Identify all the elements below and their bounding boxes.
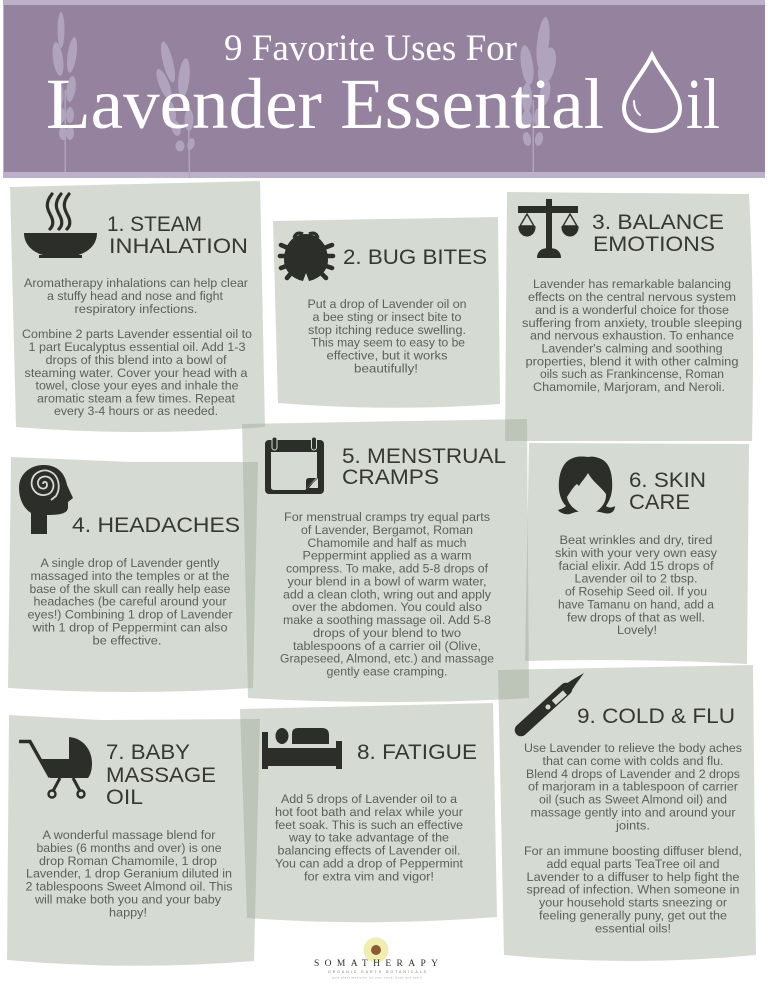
icon: bug [280, 233, 333, 281]
body text: massaged into the temples or at the [30, 569, 230, 583]
body text: respiratory infections. [74, 302, 198, 316]
body text: base of the skull can really help ease [30, 582, 231, 596]
body text [26, 828, 233, 920]
body text [524, 741, 742, 936]
title line one: 9 Favorite Uses For [224, 28, 517, 69]
body text: Lovely! [617, 623, 657, 637]
body text: will make both you and your baby [34, 892, 222, 906]
body text: feeling generally puny, get out the [539, 908, 727, 922]
body text: with 1 drop of Peppermint can also [31, 620, 228, 634]
body text: babies (6 months and over) is one [36, 841, 222, 855]
title suffix: il [686, 64, 720, 144]
body text [275, 792, 464, 884]
lavender sprig left [51, 12, 79, 172]
body text: effective, but it works [326, 348, 448, 362]
icon: oil drop [624, 55, 680, 131]
panel 6: skin care [555, 456, 718, 637]
body text: your blend in a bowl of warm water, [288, 574, 486, 588]
body text [308, 297, 467, 376]
icon: sunflower [364, 938, 388, 962]
body text: eyes!) Combining 1 drop of Lavender [28, 608, 233, 622]
body text: facial elixir. Add 15 drops of [558, 559, 714, 573]
body text: happy! [109, 906, 147, 920]
body text [555, 533, 718, 637]
body text: skin with your very own easy [555, 546, 718, 560]
body text: oils such as Frankincense, Roman [540, 367, 724, 381]
body text: For an immune boosting diffuser blend, [524, 844, 742, 858]
heading: 2. BUG BITES [343, 246, 487, 269]
body text: Lavender's calming and soothing [542, 342, 723, 356]
body text: towel, close your eyes and inhale the [36, 378, 239, 392]
body text: compress. To make, add 5-8 drops of [286, 562, 489, 576]
icon: scales [518, 199, 579, 258]
brand tagline: ORGANIC EARTH BOTANICALS [328, 970, 427, 974]
body text: your household starts sneezing or [539, 896, 727, 910]
body text: headaches (be careful around your [34, 594, 226, 608]
heading: CRAMPS [342, 466, 439, 489]
body text: make a soothing massage oil. Add 5-8 [283, 613, 491, 627]
body text: drops of this blend into a bowl of [46, 353, 227, 367]
body text: be effective. [92, 634, 162, 648]
heading: 9. COLD & FLU [577, 705, 735, 728]
body text: 1 part Eucalyptus essential oil. Add 1-3 [28, 340, 246, 354]
panel 8: fatigue [262, 728, 477, 884]
body text: massage gently into and around your [530, 806, 736, 820]
body text: hot foot bath and relax while your [275, 805, 463, 819]
body text: Chamomile, Marjoram, and Neroli. [533, 380, 725, 394]
body text: add a clean cloth, wring out and apply [283, 588, 492, 602]
body text: and nervous exhaustion. To enhance [530, 328, 734, 342]
body text: and is a wonderful choice for those [535, 303, 729, 317]
icon: thermometer [521, 673, 584, 730]
body text: properties, blend it with other calming [526, 354, 739, 368]
body text: feet soak. This is such an effective [275, 818, 463, 832]
body text: of marjoram in a tablespoon of carrier [528, 780, 738, 794]
body text: Blend 4 drops of Lavender and 2 drops [526, 767, 740, 781]
body text: Combine 2 parts Lavender essential oil to [22, 327, 252, 341]
body text: every 3-4 hours or as needed. [54, 404, 218, 418]
body text: steaming water. Cover your head with a [24, 366, 248, 380]
body text: suffering from anxiety, trouble sleeping [522, 316, 742, 330]
body text: for extra vim and vigor! [304, 870, 434, 884]
icon: calendar [265, 437, 324, 494]
body text: Use Lavender to relieve the body aches [524, 741, 742, 755]
heading: INHALATION [109, 235, 248, 258]
body text [280, 510, 494, 678]
body text: A single drop of Lavender gently [40, 556, 220, 570]
heading: 3. BALANCE [592, 211, 724, 234]
panel 7: baby massage oil [19, 737, 233, 920]
panel 2: bug bites [280, 233, 487, 376]
body text: Lavender to a diffuser to help fight the [526, 870, 740, 884]
heading: 5. MENSTRUAL [342, 445, 506, 468]
body text: a bee sting or insect bite to [312, 310, 462, 324]
body text: essential oils! [595, 922, 671, 936]
heading: 6. SKIN [629, 469, 706, 492]
body text: over the abdomen. You could also [292, 600, 482, 614]
body text: Lavender oil to 2 tbsp. [574, 572, 698, 586]
body text: gently ease cramping. [326, 664, 448, 678]
body text: You can add a drop of Peppermint [275, 856, 464, 870]
body text: Aromatherapy inhalations can help clear [24, 276, 248, 290]
body text: aromatic steam a few times. Repeat [37, 392, 236, 406]
body text: Chamomile and half as much [308, 536, 467, 550]
heading: 7. BABY [106, 741, 190, 764]
heading: OIL [106, 786, 143, 809]
panel 3: balance emotions [518, 199, 742, 394]
panel 4: headaches [19, 465, 240, 648]
lavender sprig right [518, 17, 559, 172]
body text: Beat wrinkles and dry, tired [560, 533, 713, 547]
body text: drop Roman Chamomile, 1 drop [39, 854, 217, 868]
body text: tablespoons of a carrier oil (Olive, [293, 639, 481, 653]
body text: add equal parts TeaTree oil and [546, 857, 720, 871]
body text: a stuffy head and nose and fight [47, 289, 224, 303]
panel 9: cold and flu [521, 673, 742, 936]
body text: Grapeseed, Almond, etc.) and massage [280, 652, 494, 666]
panel 5: menstrual cramps [265, 437, 506, 678]
body text: spread of infection. When someone in [526, 882, 740, 896]
body text: drops of your blend to two [313, 626, 461, 640]
body text: Lavender has remarkable balancing [533, 277, 731, 291]
heading: 8. FATIGUE [357, 741, 477, 764]
body text: Add 5 drops of Lavender oil to a [281, 792, 457, 806]
body text: A wonderful massage blend for [42, 828, 216, 842]
body text: of Lavender, Bergamot, Roman [301, 523, 473, 537]
body text: joints. [615, 818, 650, 832]
body text: This may seem to easy to be [311, 336, 465, 350]
body text: 2 tablespoons Sweet Almond oil. This [26, 880, 233, 894]
logo: Somatherapy [314, 938, 438, 980]
icon: hair and face [558, 456, 615, 514]
icon: bed [262, 728, 342, 769]
body text: have Tamanu on hand, add a [558, 598, 714, 612]
lavender sprig middle [153, 40, 196, 178]
heading [342, 445, 506, 489]
body text [522, 277, 742, 394]
body text: few drops of that as well. [567, 610, 705, 624]
body text: Lavender, 1 drop Geranium diluted in [26, 866, 232, 880]
brand small print: pure plant medicine for your mind, body and spirit [332, 976, 422, 980]
heading: CARE [629, 491, 690, 514]
body text: Put a drop of Lavender oil on [308, 297, 467, 311]
heading [629, 469, 706, 514]
body text [22, 276, 252, 418]
body text: balancing effects of Lavender oil. [278, 844, 460, 858]
heading [592, 211, 724, 256]
brand name: SOMATHERAPY [314, 959, 438, 969]
body text: Peppermint applied as a warm [302, 548, 472, 562]
body text: For menstrual cramps try equal parts [284, 510, 490, 524]
body text: stop itching reduce swelling. [308, 323, 466, 337]
body text: of Rosehip Seed oil. If you [565, 584, 707, 598]
panel 1: steam inhalation [22, 194, 252, 418]
body text [28, 556, 233, 648]
heading: EMOTIONS [593, 233, 715, 256]
body text: way to take advantage of the [288, 830, 449, 844]
heading [107, 213, 248, 258]
title line two: Lavender Essential [46, 64, 604, 144]
body text: effects on the central nervous system [528, 290, 736, 304]
icon: steaming bowl [24, 194, 97, 258]
header banner [3, 0, 765, 178]
body text: that can come with colds and flu. [542, 754, 724, 768]
heading: 4. HEADACHES [72, 514, 240, 537]
body text: beautifully! [354, 362, 418, 376]
heading: 1. STEAM [107, 213, 202, 236]
panel backgrounds [7, 181, 756, 966]
icon: head with spiral [19, 465, 73, 534]
body text: oil (such as Sweet Almond oil) and [539, 792, 727, 806]
heading [106, 741, 216, 809]
icon: baby stroller [19, 737, 92, 798]
heading: MASSAGE [106, 764, 216, 787]
